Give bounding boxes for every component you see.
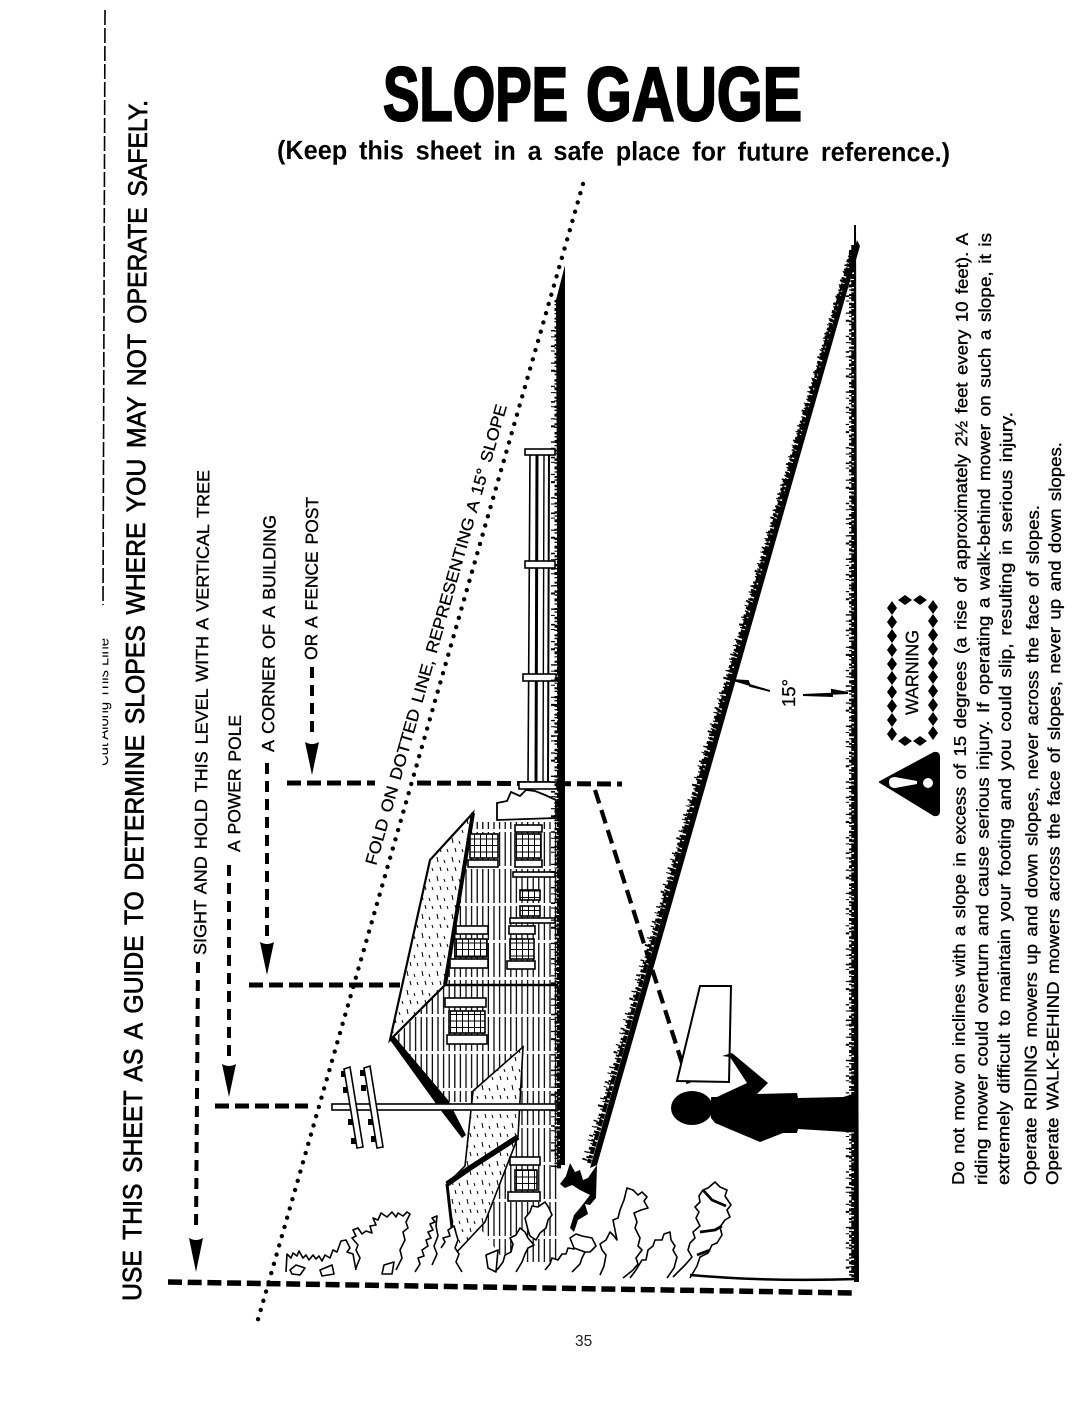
- shrubs: [286, 1182, 731, 1278]
- house lower wall: [452, 1102, 558, 1262]
- sighting instruction: tree: [189, 470, 213, 1272]
- title: [383, 52, 802, 138]
- angle label: [733, 679, 848, 707]
- dotted fold line: [257, 184, 583, 1323]
- sighting instruction: fence post: [301, 497, 322, 775]
- fence posts: [519, 449, 557, 789]
- page number: 35: [575, 1333, 592, 1350]
- ground line: main vertical: [553, 265, 565, 1170]
- sighting instruction: power pole: A POWER POLE: [224, 715, 245, 852]
- arrow: down to tree level: [189, 1238, 203, 1272]
- utility pole: [332, 1066, 556, 1148]
- main roof: [390, 813, 473, 1040]
- gable thick rafter: [390, 1036, 466, 1138]
- window sills: [445, 825, 555, 1201]
- warning text block: [949, 232, 1065, 1185]
- warning text block: Operate RIDING mowers up and down slopes, never across the face of slopes.: [1021, 505, 1043, 1185]
- windows: [445, 825, 555, 1201]
- warning text block: riding mower could overturn and cause serious injury. If operating a walk-behind mower on such a slope, it is: [972, 233, 995, 1185]
- shrub behind house: [497, 790, 556, 820]
- crossarms: [344, 1067, 363, 1148]
- arrow: down to building level: [260, 942, 274, 975]
- lower roof: [447, 1047, 523, 1254]
- ground base curve: [690, 1275, 857, 1280]
- sighting instruction: tree: SIGHT AND HOLD THIS LEVEL WITH A VERTICAL TREE: [190, 470, 213, 955]
- warning badge: [887, 595, 938, 746]
- exclamation mark: [889, 777, 917, 788]
- lower roof thick eave: [447, 1137, 518, 1184]
- back vertical line: [848, 225, 859, 1282]
- main rotated heading: USE THIS SHEET AS A GUIDE TO DETERMINE SLOPES WHERE YOU MAY NOT OPERATE SAFELY.: [117, 100, 153, 1301]
- shrub right: [600, 1188, 648, 1278]
- sighting instruction: building: A CORNER OF A BUILDING: [258, 515, 280, 752]
- body and arm: [711, 1053, 857, 1142]
- warning symbol: [880, 753, 939, 815]
- warning text block: Operate WALK-BEHIND mowers across the face of slopes, never up and down slopes.: [1043, 442, 1065, 1185]
- warning badge: WARNING: [902, 630, 922, 715]
- subtitle: (Keep this sheet in a safe place for future reference.): [277, 135, 950, 167]
- level dashed sight lines: [168, 783, 855, 1293]
- warning text block: Do not mow on inclines with a slope in excess of 15 degrees (a rise of approximately 2½ feet every 10 feet). A: [949, 232, 972, 1185]
- sighting instruction: power pole: [222, 715, 245, 1097]
- sight line to viewer: [595, 790, 690, 1088]
- hill slope line: [584, 240, 860, 1168]
- arrow: down to pole level: [222, 1064, 236, 1097]
- sighting instruction: building: [258, 515, 280, 975]
- dark tree at foot of slope: [560, 1163, 597, 1232]
- sighting sheet held by viewer: [677, 986, 731, 1082]
- fold line caption: FOLD ON DOTTED LINE, REPRESENTING A 15° SLOPE: [363, 402, 511, 867]
- cut line clipped caption: Cut Along This Line: [95, 638, 112, 766]
- fence: [519, 449, 557, 789]
- angle label: 15°: [778, 679, 799, 707]
- arrow: down to fence level: [305, 742, 319, 775]
- viewer silhouette: [671, 1053, 857, 1142]
- arrow: to vertical line: [803, 690, 848, 696]
- insulators: [341, 1070, 376, 1144]
- house: [390, 790, 558, 1262]
- sighting instruction: fence post: OR A FENCE POST: [301, 497, 322, 660]
- house gable wall: [393, 985, 558, 1102]
- shrub row left: [286, 1240, 356, 1272]
- house upper wall: [445, 822, 558, 985]
- warning text block: extremely difficult to maintain your footing and you could slip, resulting in serious injury.: [994, 412, 1016, 1185]
- diamond border: [887, 595, 938, 746]
- title: GAUGE: [586, 52, 802, 138]
- shrub row center: [497, 1228, 534, 1272]
- arrow: to slope line: [733, 680, 770, 691]
- title: SLOPE: [383, 52, 568, 138]
- head: [671, 1091, 713, 1125]
